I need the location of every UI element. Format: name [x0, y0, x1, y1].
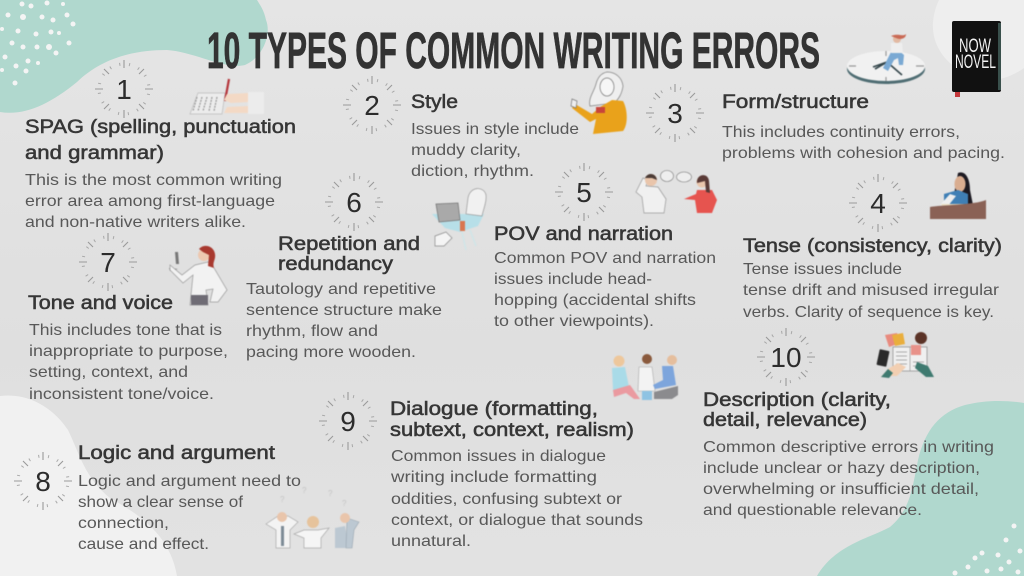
logo: Now Novel book: NOVEL [955, 51, 996, 73]
body text [494, 250, 716, 330]
body text: to other viewpoints). [494, 313, 654, 330]
icon: woman with red hair [169, 246, 227, 305]
heading: Description (clarity, [703, 389, 891, 411]
body text [703, 439, 994, 519]
number badge 10: 10 [770, 342, 802, 373]
body text: writing include formatting [390, 469, 597, 486]
number badge 6: 6 [346, 187, 362, 218]
body text: tense drift and misused irregular [743, 282, 1000, 299]
body text [743, 261, 1000, 321]
body text: verbs. Clarity of sequence is key. [743, 304, 994, 321]
heading: detail, relevance) [703, 409, 867, 431]
number badge 5 [555, 163, 613, 221]
heading [278, 233, 420, 275]
panel: 7 Tone [28, 233, 228, 403]
decorative blob: top right [933, 0, 1024, 80]
icon: three confused people: ? [328, 489, 333, 498]
heading: SPAG (spelling, punctuation [25, 116, 296, 138]
panel: 1 SPAG [25, 60, 296, 231]
body text: problems with cohesion and pacing. [722, 145, 1005, 162]
body text: cause and effect. [78, 536, 209, 553]
icon: girl reading at desk [930, 172, 986, 219]
panel: 8 Logic [14, 442, 359, 553]
icon: three confused people: ? [280, 495, 285, 504]
body text: Issues in style include [411, 121, 579, 138]
icon: two people talking [636, 170, 717, 213]
number badge 5: 5 [576, 177, 592, 208]
icon: girl with laptop and cat [432, 189, 486, 250]
icon: hands writing [190, 79, 264, 114]
body text: sentence structure make [246, 302, 442, 319]
panel: 5 POV [494, 163, 717, 330]
body text: diction, rhythm. [411, 163, 534, 180]
number badge 8: 8 [35, 466, 51, 497]
number badge 3: 3 [667, 98, 683, 129]
body text: Common issues in dialogue [391, 448, 606, 465]
panel: 3 Form/structure [646, 84, 1005, 162]
heading: Tone and voice [28, 292, 173, 314]
body text: setting, context, and [29, 364, 188, 381]
heading [390, 398, 634, 441]
body text: connection, [78, 515, 169, 532]
number badge 2: 2 [364, 90, 380, 121]
panel: 2 Style [343, 72, 627, 180]
body text [722, 124, 1005, 162]
body text: inconsistent tone/voice. [29, 386, 214, 403]
icon: hands on notebook [876, 332, 934, 378]
body text: Logic and argument need to [78, 473, 301, 490]
body text: Tautology and repetitive [246, 281, 436, 298]
body text: This includes tone that is [29, 322, 222, 339]
number badge 4 [849, 174, 907, 232]
icon: three confused people: ? [342, 499, 347, 508]
body text: hopping (accidental shifts [494, 292, 696, 309]
body text: Common descriptive errors in writing [703, 439, 994, 456]
body text [78, 473, 301, 553]
body text: and questionable relevance. [703, 502, 922, 519]
panel: 4 Tense [743, 172, 1002, 321]
body text: muddy clarity, [411, 142, 521, 159]
number badge 2 [343, 76, 401, 134]
heading: Tense (consistency, clarity) [743, 235, 1002, 257]
body text: include unclear or hazy description, [703, 460, 980, 477]
heading [25, 116, 296, 164]
number badge 6 [325, 173, 383, 231]
number badge 9 [319, 392, 377, 450]
heading: Style [411, 91, 458, 113]
body text: error area among first-language [25, 193, 275, 210]
panel: 6 Repetition [246, 173, 486, 361]
body text [25, 172, 282, 231]
heading: redundancy [278, 253, 393, 275]
body text: Tense issues include [743, 261, 902, 278]
heading: Form/structure [722, 91, 869, 113]
icon: three confused people [266, 486, 359, 548]
body text: and non-native writers alike. [25, 214, 246, 231]
body text: issues include head- [494, 271, 652, 288]
logo: Now Novel book [952, 21, 1001, 97]
heading: Dialogue (formatting, [390, 398, 598, 420]
body text: This is the most common writing [25, 172, 282, 189]
body text: context, or dialogue that sounds [391, 512, 643, 529]
body text: rhythm, flow and [246, 323, 378, 340]
number badge 1: 1 [116, 74, 132, 105]
icon: woman in yellow sweater [571, 72, 627, 134]
body text: This includes continuity errors, [722, 124, 960, 141]
number badge 1 [95, 60, 153, 118]
logo: Now Novel book: NOW [959, 35, 991, 57]
body text: inappropriate to purpose, [29, 343, 228, 360]
panel: 9 Dialogue [319, 354, 678, 550]
icon: runner on clock [847, 34, 925, 84]
icon: three confused people: ? [302, 486, 307, 495]
body text [246, 281, 442, 361]
icon: three people seated [612, 354, 678, 400]
body text: show a clear sense of [78, 494, 244, 511]
heading: subtext, context, realism) [390, 419, 634, 441]
decorative blob: bottom left [0, 395, 177, 576]
heading: Logic and argument [78, 442, 276, 464]
body text: overwhelming or insufficient detail, [703, 481, 979, 498]
decorative blob: bottom right [817, 401, 1024, 576]
heading: POV and narration [494, 223, 673, 245]
number badge 8 [14, 452, 72, 510]
number badge 10 [757, 328, 815, 386]
heading: Repetition and [278, 233, 420, 255]
body text: unnatural. [391, 533, 471, 550]
decorative blob: top left [0, 0, 268, 113]
body text [29, 322, 228, 403]
number badge 7: 7 [100, 247, 116, 278]
body text: Common POV and narration [494, 250, 716, 267]
body text [411, 121, 579, 180]
body text [390, 448, 643, 550]
heading [703, 389, 891, 431]
number badge 4: 4 [870, 188, 886, 219]
heading: and grammar) [25, 142, 164, 164]
number badge 7 [79, 233, 137, 291]
body text: pacing more wooden. [246, 344, 416, 361]
body text: oddities, confusing subtext or [391, 491, 623, 508]
number badge 9: 9 [340, 406, 356, 437]
panel: 10 Description [703, 328, 994, 519]
number badge 3 [646, 84, 704, 142]
